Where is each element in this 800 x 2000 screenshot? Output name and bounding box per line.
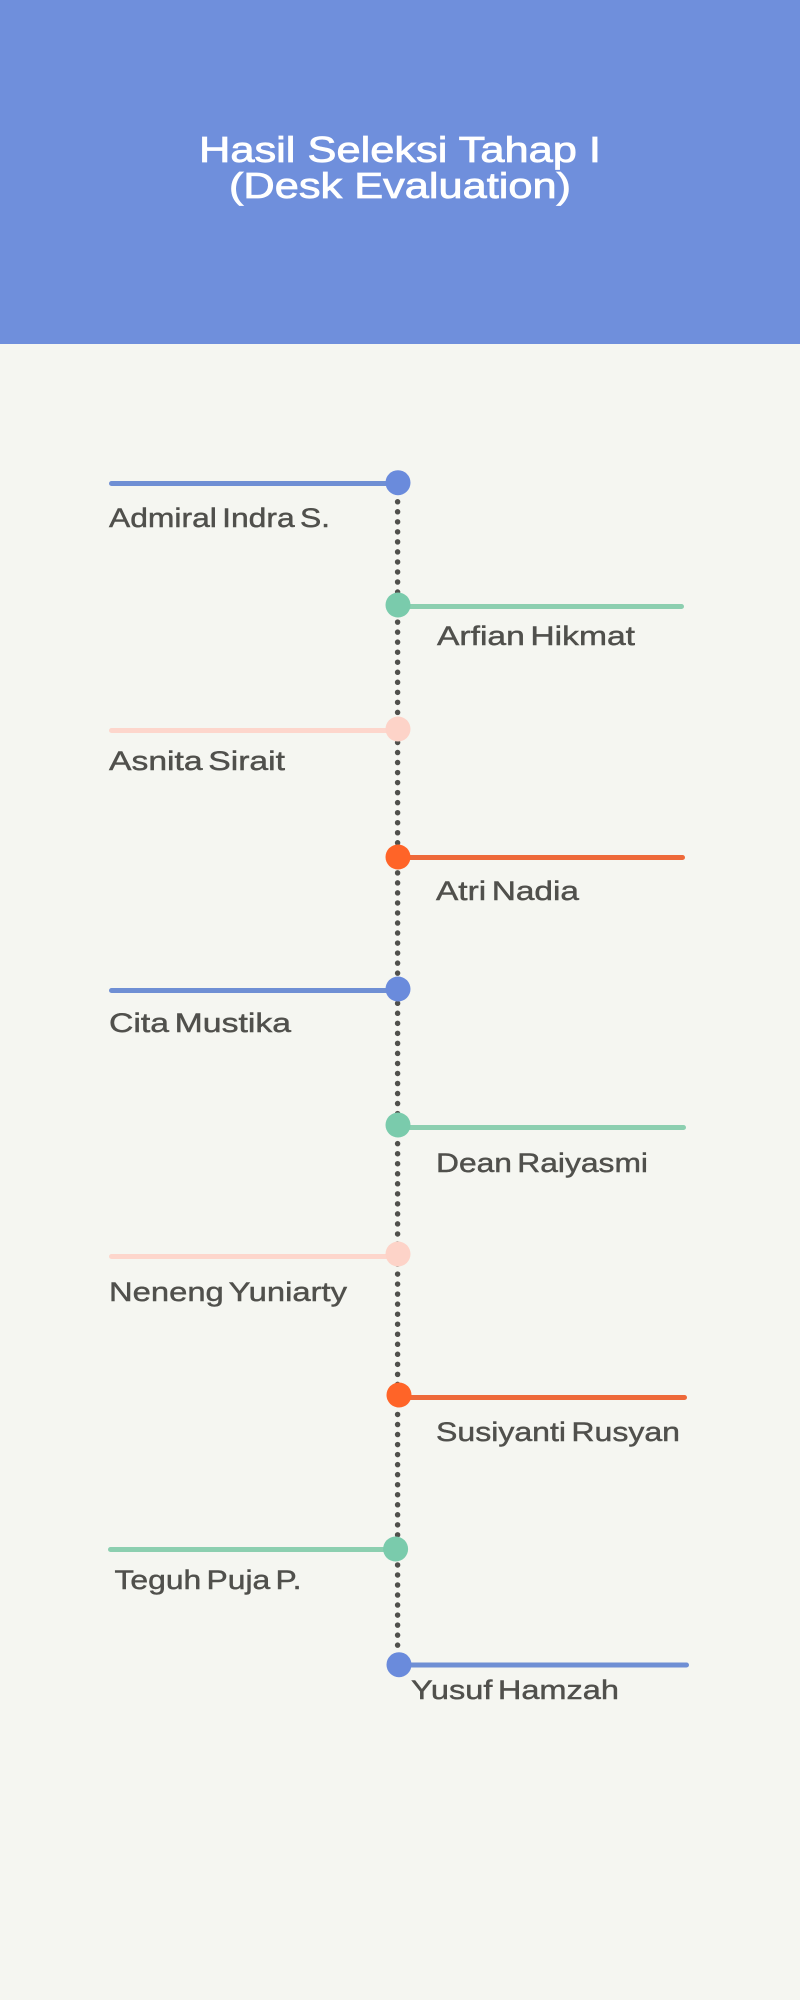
entry: Cita Mustika: Cita Mustika	[109, 1008, 292, 1038]
entry: Arfian Hikmat: Arfian Hikmat	[437, 621, 636, 651]
entry: Arfian Hikmat	[386, 592, 684, 651]
entry: Atri Nadia	[386, 844, 685, 906]
header banner	[0, 0, 800, 344]
entry: Dean Raiyasmi	[386, 1112, 686, 1178]
entry: Atri Nadia: Atri Nadia	[436, 876, 580, 906]
title	[199, 129, 601, 206]
entry: Admiral Indra S.	[109, 470, 410, 533]
entry: Asnita Sirait: Asnita Sirait	[109, 746, 286, 776]
title: Hasil Seleksi Tahap I	[199, 129, 601, 170]
entry: Cita Mustika	[109, 976, 410, 1038]
entry: Teguh Puja P.	[108, 1536, 408, 1595]
entry: Yusuf Hamzah: Yusuf Hamzah	[411, 1675, 619, 1705]
entry: Teguh Puja P.: Teguh Puja P.	[114, 1565, 302, 1595]
entry: Asnita Sirait	[109, 716, 410, 776]
entry: Susiyanti Rusyan	[386, 1382, 687, 1447]
entry: Yusuf Hamzah	[386, 1652, 689, 1705]
dotted timeline spine	[395, 482, 400, 1660]
title: (Desk Evaluation)	[229, 165, 571, 206]
entry: Neneng Yuniarty: Neneng Yuniarty	[109, 1277, 348, 1307]
entry: Neneng Yuniarty	[109, 1242, 410, 1307]
entry: Dean Raiyasmi: Dean Raiyasmi	[436, 1148, 648, 1178]
entry: Susiyanti Rusyan: Susiyanti Rusyan	[436, 1417, 680, 1447]
entry: Admiral Indra S.: Admiral Indra S.	[109, 503, 330, 533]
